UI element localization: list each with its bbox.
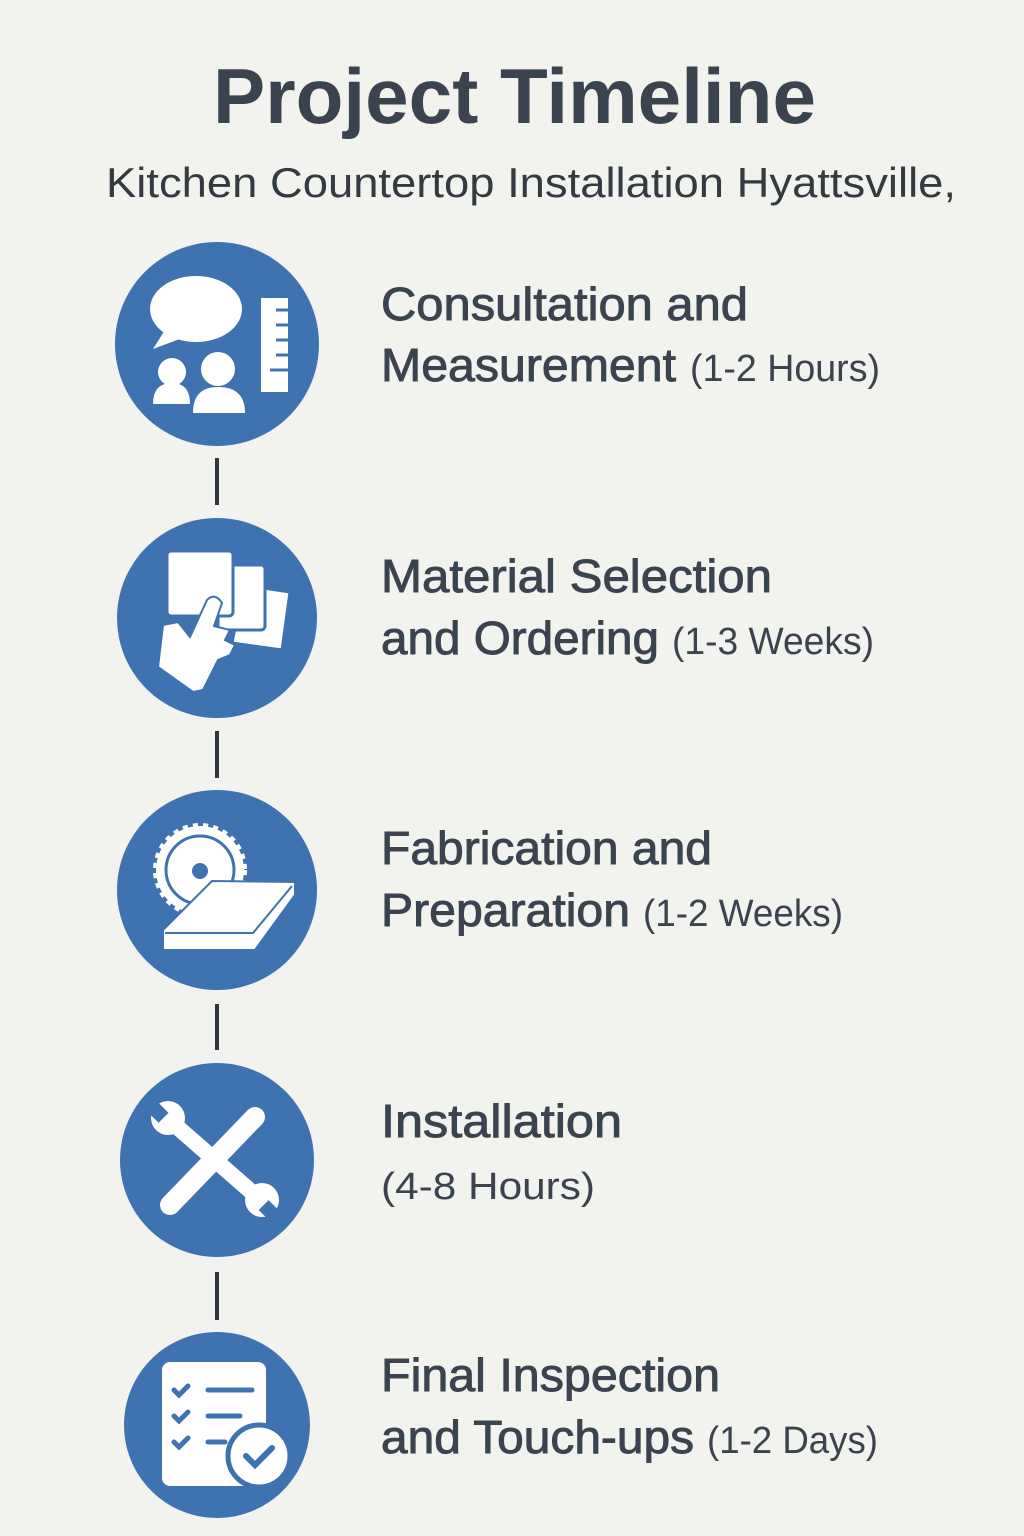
text: step 3: Preparation	[381, 884, 630, 936]
text: step 3: Fabrication and	[381, 822, 712, 874]
text: step 4: (4-8 Hours)	[381, 1166, 595, 1208]
text: step 2: Material Selection	[381, 550, 772, 602]
text: step 5: Final Inspection	[381, 1349, 720, 1401]
text: step 3	[381, 822, 843, 936]
text: step 5: and Touch-ups	[381, 1411, 694, 1463]
text: step 5	[381, 1349, 878, 1463]
connector lines	[215, 458, 219, 1320]
text: step 5: (1-2 Days)	[707, 1420, 878, 1462]
text: step 4: Installation	[381, 1095, 622, 1147]
title: Project Timeline	[213, 52, 816, 140]
text: step 3: (1-2 Weeks)	[643, 893, 843, 935]
text: step 2: (1-3 Weeks)	[672, 621, 874, 663]
icon: material selection	[117, 518, 317, 718]
icon: tools	[120, 1063, 314, 1257]
text: step 1: Measurement	[381, 339, 676, 391]
subtitle: Kitchen Countertop Installation Hyattsville,	[106, 159, 956, 206]
text: step 1	[381, 278, 880, 391]
icon: checklist	[124, 1332, 310, 1518]
text: step 4	[381, 1095, 622, 1208]
text: step 1: Consultation and	[381, 278, 748, 330]
icon: fabrication	[117, 790, 317, 990]
text: step 2	[381, 550, 874, 664]
text: step 1: (1-2 Hours)	[690, 348, 880, 390]
icon: consultation	[115, 242, 319, 446]
text: step 2: and Ordering	[381, 612, 659, 664]
